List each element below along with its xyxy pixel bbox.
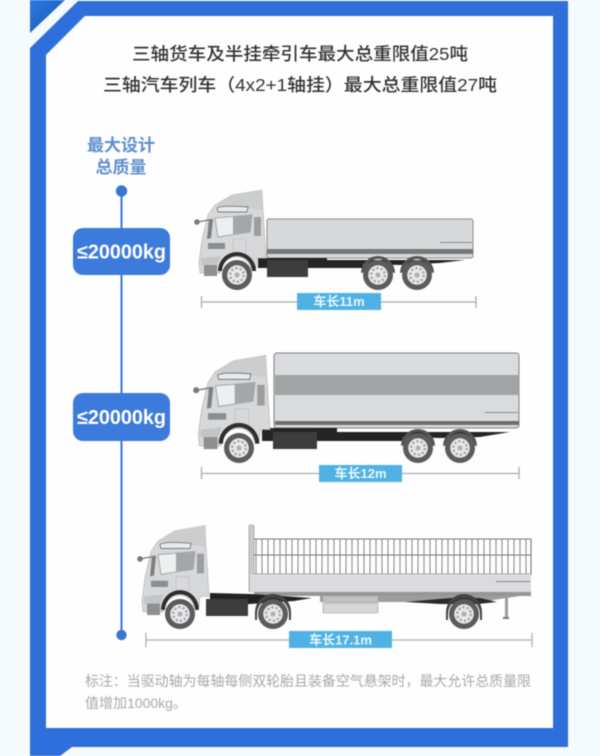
trailer bed and headboard bbox=[249, 525, 531, 602]
van box bbox=[274, 353, 519, 428]
dimension: 11m bbox=[202, 293, 476, 310]
skirt box bbox=[323, 596, 378, 613]
badge: second mass limit: ≤20000kg bbox=[77, 407, 166, 429]
badge: first mass limit bbox=[73, 228, 170, 275]
truck 1: 11m flatbed bbox=[194, 190, 476, 310]
footnote: 值增加1000kg。 bbox=[85, 695, 187, 711]
cab bbox=[194, 190, 266, 276]
dimension: 11m: 车长11m bbox=[313, 294, 365, 309]
wheels bbox=[222, 256, 434, 290]
dimension: 17.1m: 车长17.1m bbox=[309, 632, 372, 648]
fuel tank bbox=[267, 260, 308, 277]
truck 2: 12m van bbox=[193, 353, 519, 482]
axis line with dots bbox=[116, 185, 127, 640]
axis heading: 最大设计 bbox=[87, 136, 155, 155]
fuel tank bbox=[206, 599, 248, 616]
trailer fence bbox=[254, 539, 531, 575]
truck 3: 17.1m semi-trailer bbox=[137, 525, 532, 648]
badge: second mass limit bbox=[73, 393, 170, 441]
landing gear and rear chassis bbox=[405, 597, 509, 619]
corner triangle bbox=[30, 0, 65, 33]
wheels bbox=[165, 594, 482, 629]
title: 三轴货车及半挂牵引车最大总重限值25吨 bbox=[132, 44, 468, 64]
cab bbox=[137, 526, 209, 615]
white panel bbox=[46, 16, 553, 728]
dimension: 17.1m bbox=[146, 631, 532, 648]
cab bbox=[193, 355, 270, 449]
fuel tank bbox=[273, 432, 317, 449]
cargo box bbox=[267, 219, 473, 258]
dimension: 12m bbox=[202, 465, 519, 482]
wheels bbox=[224, 429, 477, 463]
tractor chassis bbox=[210, 593, 312, 606]
title bbox=[103, 44, 497, 95]
axis heading bbox=[87, 136, 155, 177]
badge: first mass limit: ≤20000kg bbox=[77, 242, 166, 264]
axis heading: 总质量 bbox=[96, 157, 146, 177]
chassis bbox=[258, 258, 465, 268]
dimension: 12m: 车长12m bbox=[334, 466, 387, 481]
footnote: 标注：当驱动轴为每轴每侧双轮胎且装备空气悬架时，最大允许总质量限 bbox=[85, 673, 531, 689]
chassis bbox=[262, 428, 510, 441]
footnote bbox=[85, 673, 531, 711]
title: 三轴汽车列车（4x2+1轴挂）最大总重限值27吨 bbox=[103, 75, 497, 95]
